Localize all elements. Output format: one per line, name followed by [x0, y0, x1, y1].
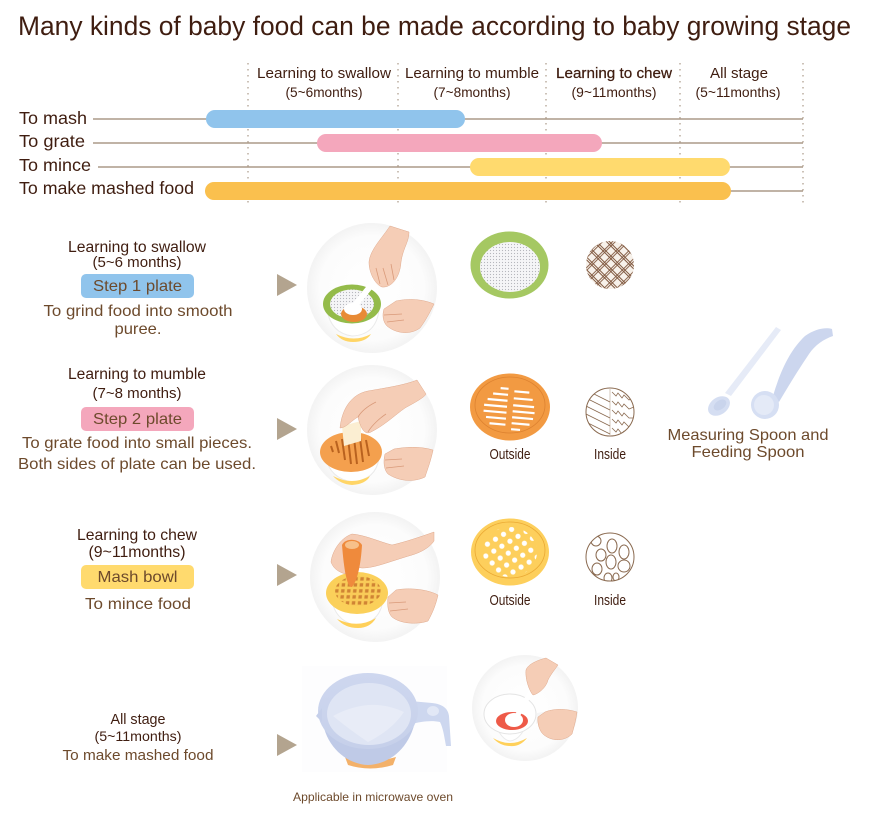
column header: all stage: (5~11months) — [696, 85, 780, 100]
photo: mincing carrot on mash bowl — [310, 512, 440, 642]
column header: learning to mumble — [405, 65, 539, 100]
text block: all stage — [62, 712, 214, 764]
text block: all stage: (5~11months) — [94, 728, 182, 744]
column header: learning to mumble: (7~8months) — [434, 85, 510, 100]
photo: mashing tomato in bowl — [472, 655, 578, 761]
badge: mash bowl: Mash bowl — [98, 569, 178, 586]
badge: step 1 plate — [81, 274, 194, 298]
photo: grinding in step 1 plate — [307, 223, 437, 353]
badge: step 2 plate: Step 2 plate — [93, 411, 182, 428]
badge: step 2 plate — [81, 407, 194, 431]
photo: grating on step 2 plate — [307, 365, 437, 495]
bar: to mince — [470, 158, 730, 176]
text block: chew stage: Learning to chew — [77, 527, 198, 544]
label: inside: Inside — [594, 446, 626, 463]
text block: mumble stage: (7~8 months) — [92, 385, 182, 402]
row label: to mash: To mash — [19, 108, 87, 128]
icon: inside slanted slot pattern — [586, 388, 634, 436]
text block: chew stage: (9~11months) — [88, 544, 186, 561]
column header: learning to chew: (9~11months) — [572, 85, 656, 100]
badge: step 1 plate: Step 1 plate — [93, 278, 182, 295]
row label: to mince: To mince — [19, 155, 91, 175]
spoon caption — [668, 427, 828, 461]
spoons — [704, 327, 833, 420]
text block: swallow stage: (5~6 months) — [92, 254, 182, 271]
icon: inside round cutter pattern — [586, 533, 634, 583]
spoon caption: Feeding Spoon — [692, 444, 804, 461]
text block: all stage: All stage — [110, 712, 166, 728]
text block: swallow stage — [44, 239, 232, 338]
mash bowl product — [302, 666, 451, 772]
text block: mumble stage — [18, 366, 256, 473]
column header: all stage: All stage — [710, 65, 768, 82]
column header: learning to mumble: Learning to mumble — [405, 65, 539, 82]
spoon caption: Measuring Spoon and — [668, 427, 828, 444]
column header: learning to swallow: (5~6months) — [286, 85, 362, 100]
label: outside: Outside — [490, 592, 530, 609]
column header: learning to swallow: Learning to swallow — [257, 65, 391, 82]
column header: learning to swallow — [257, 65, 391, 100]
bar: to grate — [317, 134, 602, 152]
timeline chart — [19, 63, 803, 204]
label: outside: Outside — [490, 446, 530, 463]
arrow 4 — [277, 734, 297, 756]
plate: step 1 mesh — [470, 232, 548, 298]
text block: swallow stage: Learning to swallow — [68, 239, 207, 256]
bar: to make mashed food — [205, 182, 731, 200]
caption: microwave: Applicable in microwave oven — [293, 790, 453, 804]
arrow 2 — [277, 418, 297, 440]
plate: mash bowl outside — [471, 518, 549, 586]
column header: all stage — [696, 65, 780, 100]
icon: inside lattice pattern — [586, 241, 634, 289]
text block: mumble stage: Learning to mumble — [68, 366, 206, 383]
plate: step 2 outside — [470, 374, 550, 440]
text block: mumble stage: Both sides of plate can be used. — [18, 456, 256, 473]
column header: learning to chew — [556, 65, 672, 100]
row label: to make mashed food: To make mashed food — [19, 178, 194, 198]
text block: chew stage — [77, 527, 198, 613]
label: inside: Inside — [594, 592, 626, 609]
text block: swallow stage: puree. — [114, 321, 162, 338]
title: Many kinds of baby food can be made according to baby growing stage — [18, 11, 851, 41]
column header: learning to chew: Learning to chew — [556, 65, 672, 82]
bar: to mash — [206, 110, 465, 128]
text block: chew stage: To mince food — [85, 596, 191, 613]
row label: to grate: To grate — [19, 131, 85, 151]
arrow 1 — [277, 274, 297, 296]
text block: swallow stage: To grind food into smooth — [44, 303, 232, 320]
text block: all stage: To make mashed food — [62, 747, 214, 764]
text block: mumble stage: To grate food into small pieces. — [22, 435, 252, 452]
arrow 3 — [277, 564, 297, 586]
